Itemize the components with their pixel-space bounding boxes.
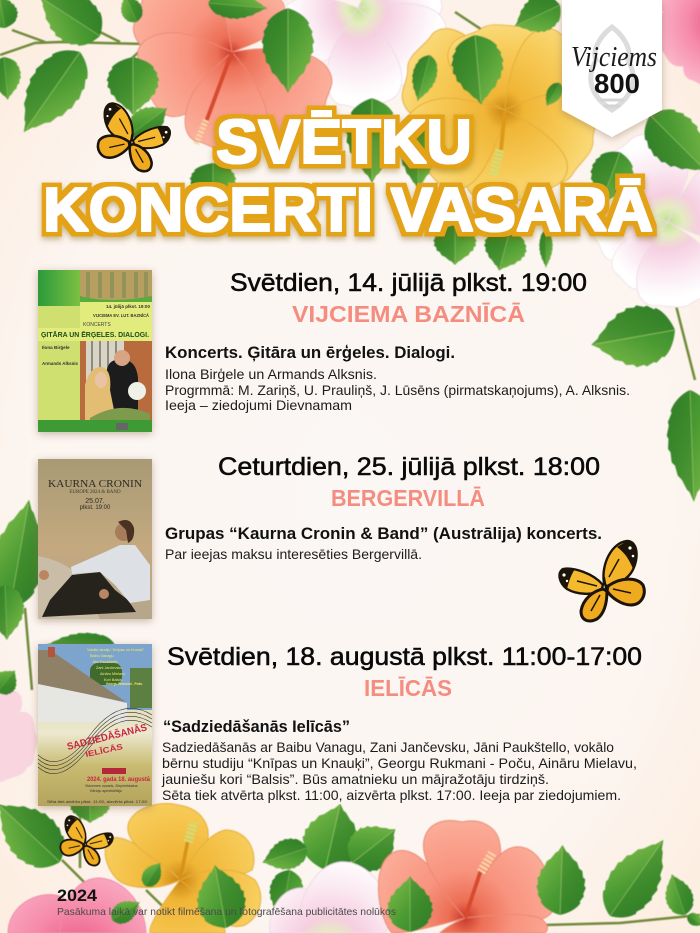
event 3: location: IELĪCĀS xyxy=(364,675,452,701)
event 2: location: BERGERVILLĀ xyxy=(331,485,485,511)
event 2: description: Grupas “Kaurna Cronin & Band” (Austrālija) koncerts. xyxy=(165,525,602,543)
poster: Sadziedāšanās Ielīcās: Vokālo studiju "Knīpas un Knauķi" xyxy=(87,648,145,652)
event 1: description: Koncerts. Ģitāra un ērģeles. Dialogi. xyxy=(165,344,455,362)
poster: Ģitāra un ērģeles: Armands Alksnis xyxy=(42,361,78,366)
flower: coral top xyxy=(132,0,333,148)
flower: yellow top xyxy=(400,24,596,202)
footer: year: 2024 xyxy=(57,886,98,905)
event 1: location: VIJCIEMA BAZNĪCĀ xyxy=(292,301,525,327)
poster: Sadziedāšanās Ielīcās: Sēta tiek atvērta plkst. 11:00, aizvērta plkst. 17:00 xyxy=(47,800,147,804)
poster: Ģitāra un ērģeles: Ilona Birģele xyxy=(42,344,70,350)
poster: Sadziedāšanās Ielīcās: IELĪCĀS xyxy=(85,742,124,759)
flower: pink bottom left xyxy=(8,878,146,933)
poster: Kaurna Cronin: 25.07. xyxy=(85,498,105,505)
event 3: description: Sadziedāšanās ar Baibu Vanagu, Zani Jančevsku, Jāni Paukštello, vokālo xyxy=(162,739,614,755)
poster: Sadziedāšanās Ielīcās: Jāni Paukštello xyxy=(92,660,118,664)
poster: Sadziedāšanās Ielīcās: Georgu Rukmani - Poču xyxy=(106,682,142,686)
leaves behind title and bottom group xyxy=(70,98,640,922)
poster: Ģitāra un ērģeles xyxy=(38,270,152,432)
title: SVĒTKU xyxy=(216,108,472,177)
poster: Ģitāra un ērģeles: 14. jūlijā plkst. 19:00 xyxy=(106,304,150,309)
poster: Sadziedāšanās Ielīcās: Vidzemes novads, Ziepniekkalna xyxy=(85,784,137,788)
butterfly: bottom left xyxy=(60,816,113,866)
poster: Kaurna Cronin: KAURNA CRONIN xyxy=(48,479,142,490)
event 1: description: Ieeja – ziedojumi Dievnamam xyxy=(165,397,352,413)
poster: Sadziedāšanās Ielīcās xyxy=(38,644,152,806)
poster: Sadziedāšanās Ielīcās: Kārtoju apmeklētāju xyxy=(90,789,122,793)
poster: Sadziedāšanās Ielīcās: Baibu Vanagu xyxy=(90,654,114,658)
event 1: heading: Svētdien, 14. jūlijā plkst. 19:00 xyxy=(230,269,587,297)
flower: coral bottom xyxy=(378,821,557,933)
event 1: description: Ilona Birģele un Armands Alksnis. xyxy=(165,366,377,382)
footer: notice: Pasākuma laikā var notikt filmēšana un fotografēšana publicitātes nolūkos xyxy=(57,906,396,918)
title xyxy=(43,108,653,245)
poster: Ģitāra un ērģeles: KONCERTS xyxy=(83,322,111,328)
poster: Sadziedāšanās Ielīcās: SADZIEDĀŠANĀS xyxy=(66,720,149,753)
poster: Sadziedāšanās Ielīcās: 2024. gada 18. augustā xyxy=(87,776,150,783)
event 3: description: Sēta tiek atvērta plkst. 11:00, aizvērta plkst. 17:00. Ieeja par ziedojumiem. xyxy=(162,787,621,803)
event 2: description: Par ieejas maksu interesēties Bergervillā. xyxy=(165,546,422,562)
flower: pink left xyxy=(0,686,37,788)
event 1: description: Progrmmā: M. Zariņš, U. Prauliņš, J. Lūsēns (pirmatskaņojums), A. Alksnis. xyxy=(165,382,630,398)
poster: Ģitāra un ērģeles: ĢITĀRA UN ĒRĢELES. DIALOGI. xyxy=(41,331,149,339)
flower: yellow bottom xyxy=(105,804,261,933)
flower: white right xyxy=(596,133,700,308)
butterfly: middle right xyxy=(560,541,644,621)
poster: Ģitāra un ērģeles: VIJCIEMA EV. LUT. BAZNĪCĀ xyxy=(93,312,150,318)
event 2: description xyxy=(165,525,602,562)
poster: Kaurna Cronin: EUROPE 2024 & BAND xyxy=(69,490,121,495)
poster: Kaurna Cronin xyxy=(38,459,152,619)
event 2: heading: Ceturtdien, 25. jūlijā plkst. 18:00 xyxy=(218,453,600,481)
event 3: heading: Svētdien, 18. augustā plkst. 11:00-17:00 xyxy=(167,643,642,671)
flower: white bottom xyxy=(270,862,390,933)
flower: white top xyxy=(274,0,459,113)
flower: pink top right xyxy=(662,0,700,85)
poster: Sadziedāšanās Ielīcās: Zani Jančevsku xyxy=(96,666,122,670)
event 3: description: “Sadziedāšanās Ielīcās” xyxy=(163,718,350,736)
poster: Sadziedāšanās Ielīcās: Kori Balsis xyxy=(104,678,122,682)
poster: Sadziedāšanās Ielīcās: Aināru Mielavu xyxy=(100,672,125,676)
logo banner: Vijciems 800: 800 xyxy=(594,68,640,99)
event 1: description xyxy=(165,344,630,413)
event 3: description: bērnu studiju “Knīpas un Knauķi”, Georgu Rukmani - Poču, Aināru Mielavu, xyxy=(162,755,637,771)
butterfly: top left xyxy=(98,103,170,171)
title: KONCERTI VASARĀ xyxy=(43,176,653,245)
logo banner: Vijciems 800 xyxy=(562,0,662,137)
event 3: description: jauniešu kori “Balsis”. Būs amatnieku un mājražotāju tirdziņš. xyxy=(161,771,549,787)
event 3: description xyxy=(161,718,637,803)
logo banner: Vijciems 800: Vijciems xyxy=(571,42,657,73)
poster: Kaurna Cronin: plkst. 19:00 xyxy=(80,505,111,511)
